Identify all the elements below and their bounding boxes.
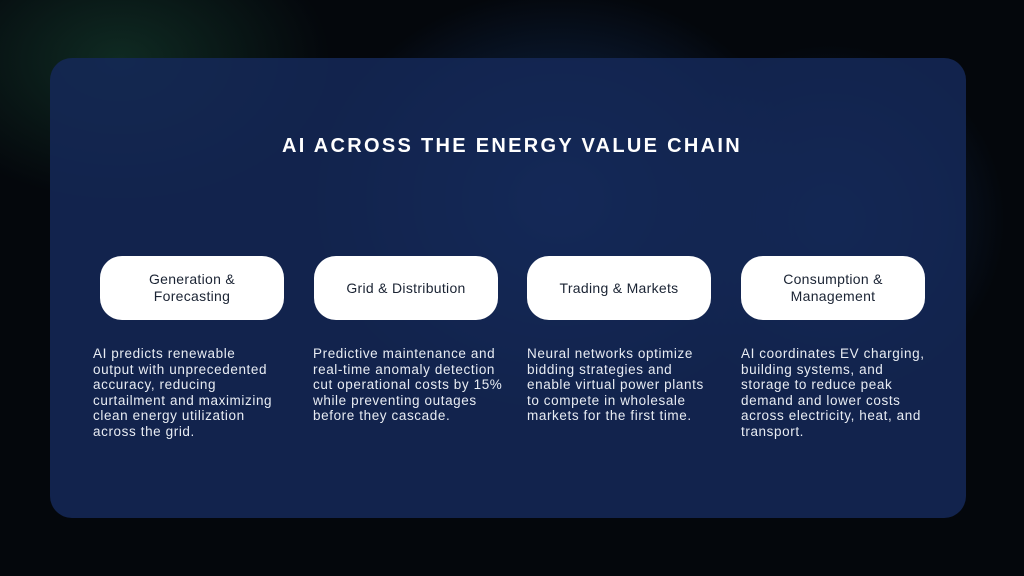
text: grid: while preventing outages	[313, 392, 477, 408]
text: grid: cut operational costs by 15%	[313, 377, 502, 392]
text: trading: Neural networks optimize	[527, 346, 693, 361]
panel: main	[50, 58, 966, 518]
text: consumption: building systems, and	[741, 362, 883, 376]
pill: Consumption & Management	[741, 256, 925, 320]
text: generation: accuracy, reducing	[93, 377, 216, 392]
text: consumption: demand and lower costs	[741, 392, 901, 408]
text: generation: across the grid.	[93, 424, 195, 438]
text: consumption: storage to reduce peak	[741, 377, 892, 392]
text: consumption: across electricity, heat, and	[741, 408, 921, 423]
text: generation: output with unprecedented	[93, 362, 267, 376]
pill: Consumption & Management: Management	[791, 288, 875, 304]
text: generation: AI predicts renewable	[93, 346, 235, 361]
text: generation: clean energy utilization	[93, 408, 245, 423]
pill: Grid & Distribution: Grid & Distribution	[346, 280, 466, 296]
text: trading: bidding strategies and	[527, 362, 672, 376]
text: consumption: AI coordinates EV charging,	[741, 346, 925, 361]
pill: Trading & Markets: Trading & Markets	[560, 280, 678, 296]
text: grid	[313, 346, 502, 423]
text: grid: Predictive maintenance and	[313, 346, 495, 361]
title: AI ACROSS THE ENERGY VALUE CHAIN	[282, 135, 742, 157]
pill: Consumption & Management: Consumption &	[783, 271, 883, 287]
text: trading: markets for the first time.	[527, 408, 692, 423]
text: trading	[527, 346, 704, 423]
text: trading: to compete in wholesale	[527, 392, 686, 408]
text: consumption: transport.	[741, 424, 804, 438]
text: grid: real-time anomaly detection	[313, 362, 495, 376]
pill: Trading & Markets	[527, 256, 711, 320]
pill: Generation & Forecasting	[100, 256, 284, 320]
text: generation: curtailment and maximizing	[93, 392, 272, 408]
text: generation	[93, 346, 272, 439]
text: grid: before they cascade.	[313, 408, 450, 423]
text: consumption	[741, 346, 925, 439]
pill: Grid & Distribution	[314, 256, 498, 320]
pill: Generation & Forecasting: Forecasting	[154, 288, 230, 304]
pill: Generation & Forecasting: Generation &	[149, 271, 235, 287]
text: trading: enable virtual power plants	[527, 377, 704, 392]
